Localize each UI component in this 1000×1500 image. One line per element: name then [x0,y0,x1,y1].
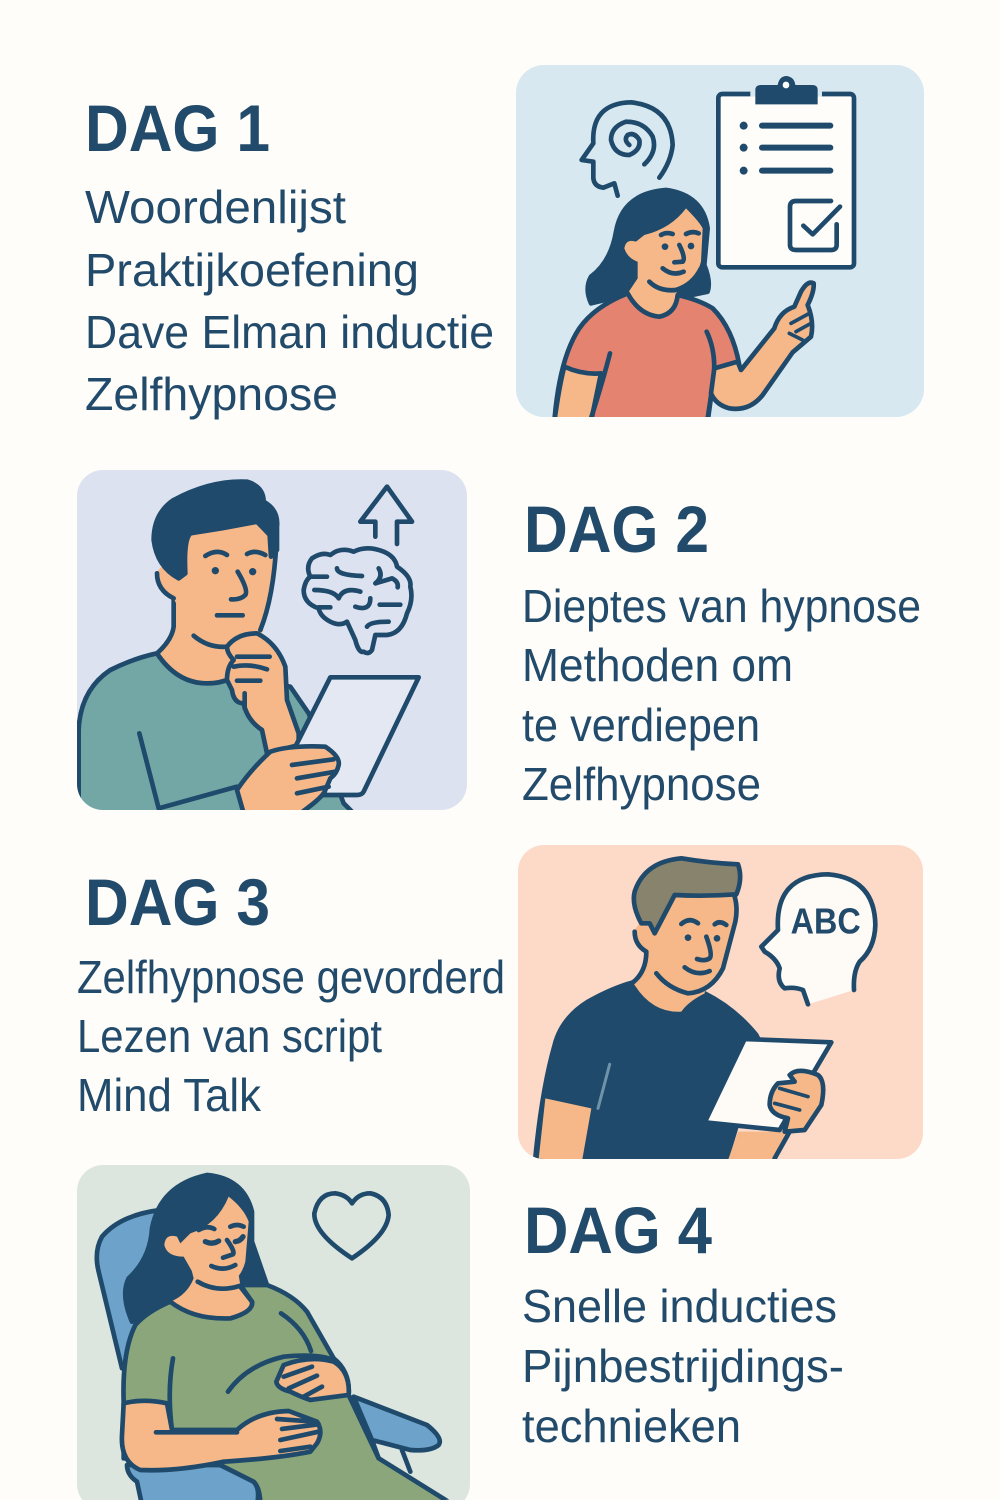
text block: day 2 topics: Methoden om [522,639,793,691]
icon: head with spiral [582,102,673,196]
icon: clipboard checklist [718,76,854,267]
text block: day 2 topics: Dieptes van hypnose [522,580,921,632]
panel: day 4 illustration [77,1165,470,1500]
panel: day 2 illustration [77,470,467,817]
text block: day 1 topics: Woordenlijst [85,181,346,233]
text block: day 3 topics [77,951,505,1121]
text block: day 2 topics [522,580,921,810]
illustration: pregnant woman in chair [97,1175,454,1500]
panel: day 3 illustration [518,845,923,1165]
illustration: man thinking and reading [79,482,419,817]
illustration: man reading [535,858,831,1165]
icon: head with ABC [761,874,875,1004]
text block: day 1 topics [85,181,494,420]
icon: heart [314,1193,389,1258]
text block: day 1 topics: Praktijkoefening [85,244,419,296]
heading: DAG 4: DAG 4 [524,1193,712,1267]
text block: day 3 topics: Zelfhypnose gevorderd [77,951,505,1003]
heading: DAG 2: DAG 2 [524,492,709,566]
icon: brain with arrow [304,487,412,653]
illustration: woman pointing [554,190,814,422]
text block: day 2 topics: te verdiepen [522,699,760,751]
label: ABC: ABC [791,901,861,942]
panel: day 1 illustration [516,65,924,422]
text block: day 4 topics: Pijnbestrijdings- [522,1340,844,1392]
text block: day 3 topics: Lezen van script [77,1010,382,1062]
text block: day 3 topics: Mind Talk [77,1069,262,1121]
text block: day 1 topics: Dave Elman inductie [85,306,494,358]
text block: day 4 topics: technieken [522,1400,741,1452]
text block: day 1 topics: Zelfhypnose [85,368,338,420]
heading: DAG 1: DAG 1 [85,91,270,165]
text block: day 4 topics: Snelle inducties [522,1280,837,1332]
text block: day 4 topics [522,1280,844,1452]
heading: DAG 3: DAG 3 [85,865,270,939]
text block: day 2 topics: Zelfhypnose [522,758,761,810]
